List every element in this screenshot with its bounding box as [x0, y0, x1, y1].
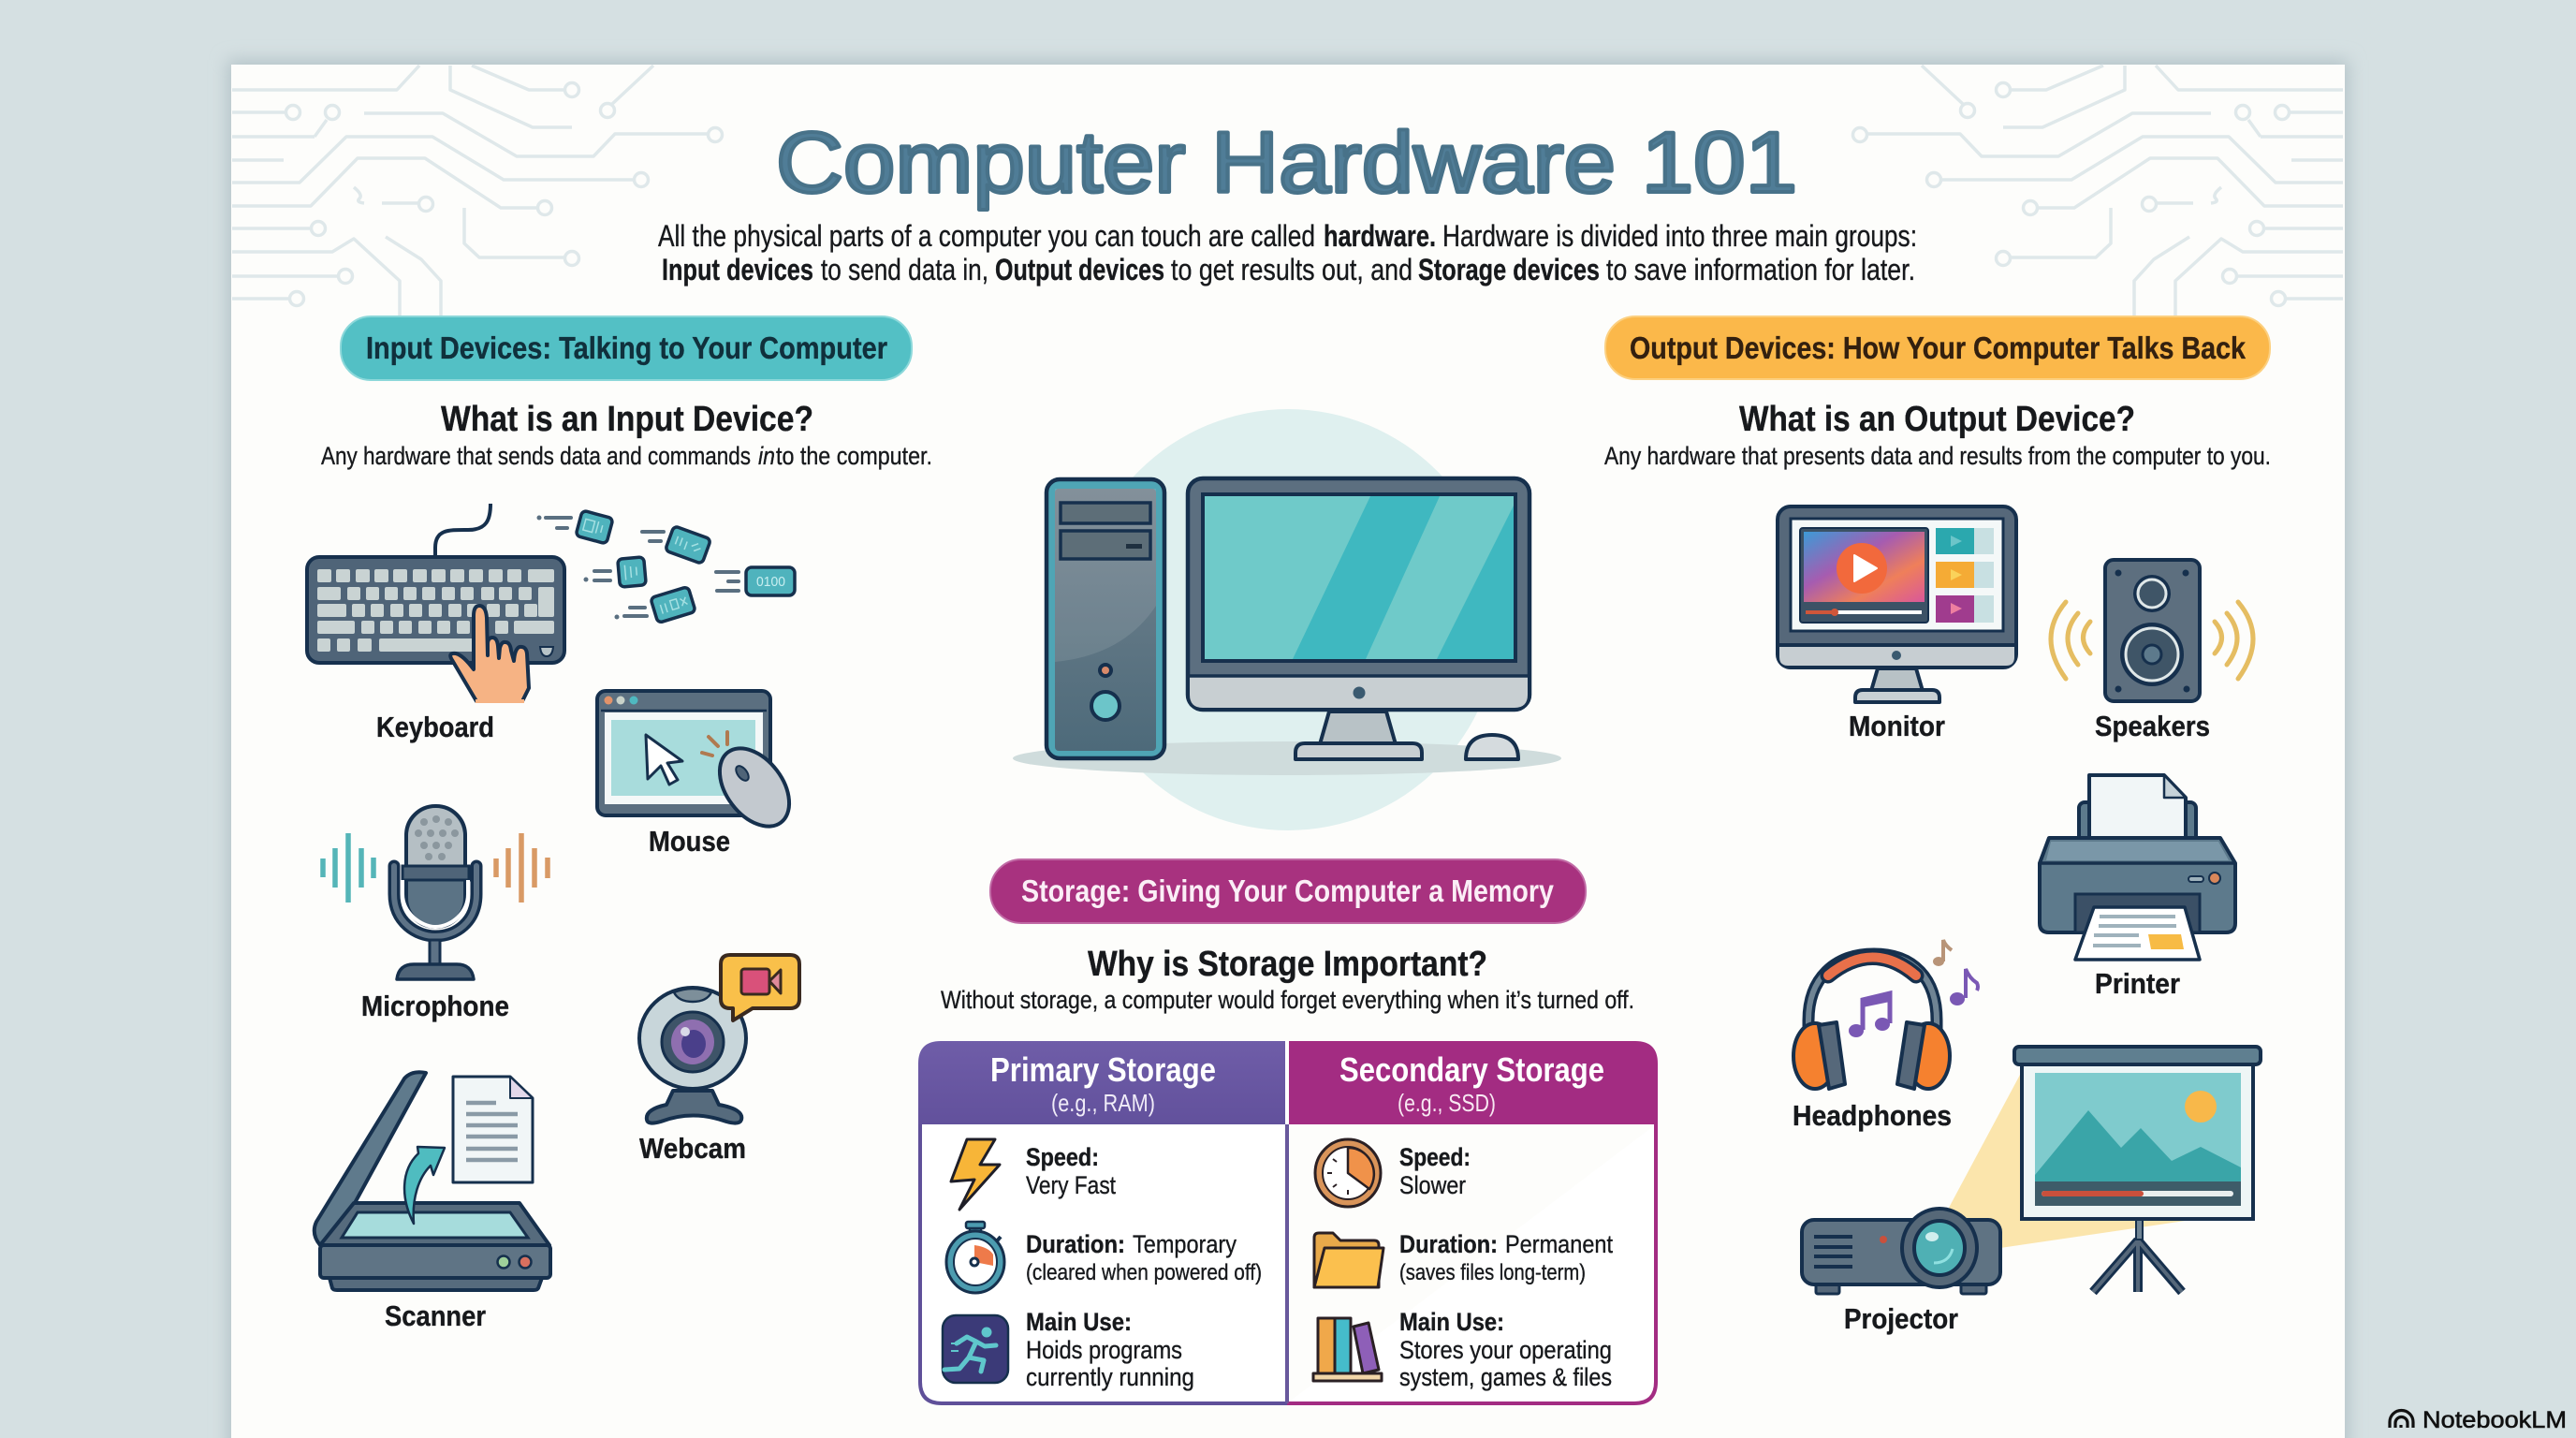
label: printer: Printer [2095, 967, 2180, 1000]
circuit decoration: left [232, 66, 723, 315]
icon: stopwatch [946, 1222, 1004, 1293]
desk mouse [1466, 735, 1518, 759]
speed primary [1026, 1143, 1116, 1199]
input pill [341, 316, 912, 380]
main use secondary [1399, 1308, 1612, 1391]
panel: main card [231, 65, 2345, 1438]
icon: speakers [2051, 560, 2253, 701]
main use secondary: Stores your operating [1399, 1336, 1612, 1364]
icon: mouse [597, 691, 803, 840]
duration secondary: Duration: [1399, 1230, 1498, 1258]
duration secondary: (saves files long-term) [1399, 1260, 1586, 1285]
icon: keyboard [307, 504, 564, 703]
duration primary: Temporary [1133, 1230, 1237, 1258]
label: webcam: Webcam [639, 1132, 746, 1165]
label: headphones: Headphones [1793, 1099, 1952, 1132]
icon: headphones [1793, 940, 1978, 1089]
main use secondary: Main Use: [1399, 1308, 1504, 1336]
icon: monitor [1778, 506, 2016, 702]
input description: Any hardware that sends data and commands [321, 442, 751, 470]
label: mouse: Mouse [649, 825, 730, 858]
input heading: What is an Input Device? [441, 400, 813, 439]
icon: projector and screen [1802, 1047, 2261, 1294]
label: speakers: Speakers [2095, 710, 2210, 742]
comparison table [918, 1041, 1658, 1403]
speed secondary [1399, 1143, 1471, 1199]
icon: lightning bolt [951, 1139, 1000, 1210]
speed secondary: Slower [1399, 1171, 1466, 1199]
computer tower [1046, 479, 1164, 758]
icon: clock [1315, 1139, 1381, 1207]
icon: runner [943, 1315, 1008, 1383]
storage description: Without storage, a computer would forget everything when it’s turned off. [941, 986, 1634, 1014]
duration primary [1026, 1230, 1262, 1285]
intro text: Input devices [662, 253, 813, 286]
icon: folder [1314, 1233, 1383, 1287]
intro text: Output devices [995, 253, 1164, 286]
NotebookLM watermark: NotebookLM [2422, 1407, 2567, 1433]
icon: flying keys [537, 510, 795, 624]
speed secondary: Speed: [1399, 1143, 1471, 1171]
icon: webcam [639, 955, 799, 1123]
intro text: All the physical parts of a computer you can touch are called [658, 219, 1315, 253]
main use primary: currently running [1026, 1363, 1194, 1391]
title: Computer Hardware 101 [776, 115, 1797, 211]
output heading: What is an Output Device? [1739, 400, 2135, 439]
output description: Any hardware that presents data and results from the computer to you. [1604, 442, 2271, 470]
primary storage header: (e.g., RAM) [1051, 1089, 1155, 1117]
storage pill: Storage: Giving Your Computer a Memory [1021, 873, 1555, 908]
card shadow [227, 60, 2349, 1438]
main use primary: Hoids programs [1026, 1336, 1182, 1364]
input description: to the computer. [776, 442, 932, 470]
input description: in [758, 442, 775, 470]
secondary storage header: (e.g., SSD) [1398, 1089, 1496, 1117]
duration secondary [1399, 1230, 1613, 1285]
icon: printer [2040, 775, 2235, 960]
duration secondary: Permanent [1505, 1230, 1613, 1258]
main use secondary: system, games & files [1399, 1363, 1612, 1391]
speed primary: Very Fast [1026, 1171, 1116, 1199]
label: projector: Projector [1844, 1302, 1958, 1335]
storage heading: Why is Storage Important? [1088, 945, 1487, 984]
panel: output devices [1604, 316, 2271, 1335]
main use primary: Main Use: [1026, 1308, 1132, 1336]
monitor [1188, 478, 1530, 759]
output pill [1605, 316, 2270, 379]
secondary storage header [1339, 1050, 1604, 1117]
main use primary [1026, 1308, 1194, 1391]
label: monitor: Monitor [1849, 710, 1945, 742]
label: microphone: Microphone [361, 990, 509, 1022]
output pill: Output Devices: How Your Computer Talks Back [1630, 330, 2247, 365]
panel: input devices [307, 316, 932, 1332]
intro text: to get results out, and [1171, 253, 1412, 286]
intro text: Storage devices [1418, 253, 1600, 286]
intro text: to save information for later. [1606, 253, 1915, 286]
panel: storage [918, 859, 1658, 1403]
illustration: desktop computer [1013, 409, 1561, 830]
icon: scanner [315, 1072, 550, 1290]
circuit decoration: right [1853, 66, 2343, 315]
icon: flying keys: 0100 [756, 574, 785, 590]
secondary storage header: Secondary Storage [1339, 1050, 1604, 1089]
duration primary: Duration: [1026, 1230, 1125, 1258]
primary storage header: Primary Storage [990, 1050, 1216, 1089]
intro text: Hardware is divided into three main groups: [1442, 219, 1917, 253]
label: scanner: Scanner [385, 1299, 486, 1332]
storage pill [990, 859, 1586, 923]
intro text: hardware. [1324, 219, 1436, 253]
primary storage header [990, 1050, 1216, 1117]
icon: microphone [323, 806, 548, 979]
input pill: Input Devices: Talking to Your Computer [366, 330, 887, 365]
icon: books [1313, 1318, 1382, 1381]
duration primary: (cleared when powered off) [1026, 1260, 1262, 1285]
intro text [658, 219, 1917, 286]
speed primary: Speed: [1026, 1143, 1099, 1171]
label: keyboard: Keyboard [376, 711, 494, 743]
intro text: to send data in, [821, 253, 988, 286]
